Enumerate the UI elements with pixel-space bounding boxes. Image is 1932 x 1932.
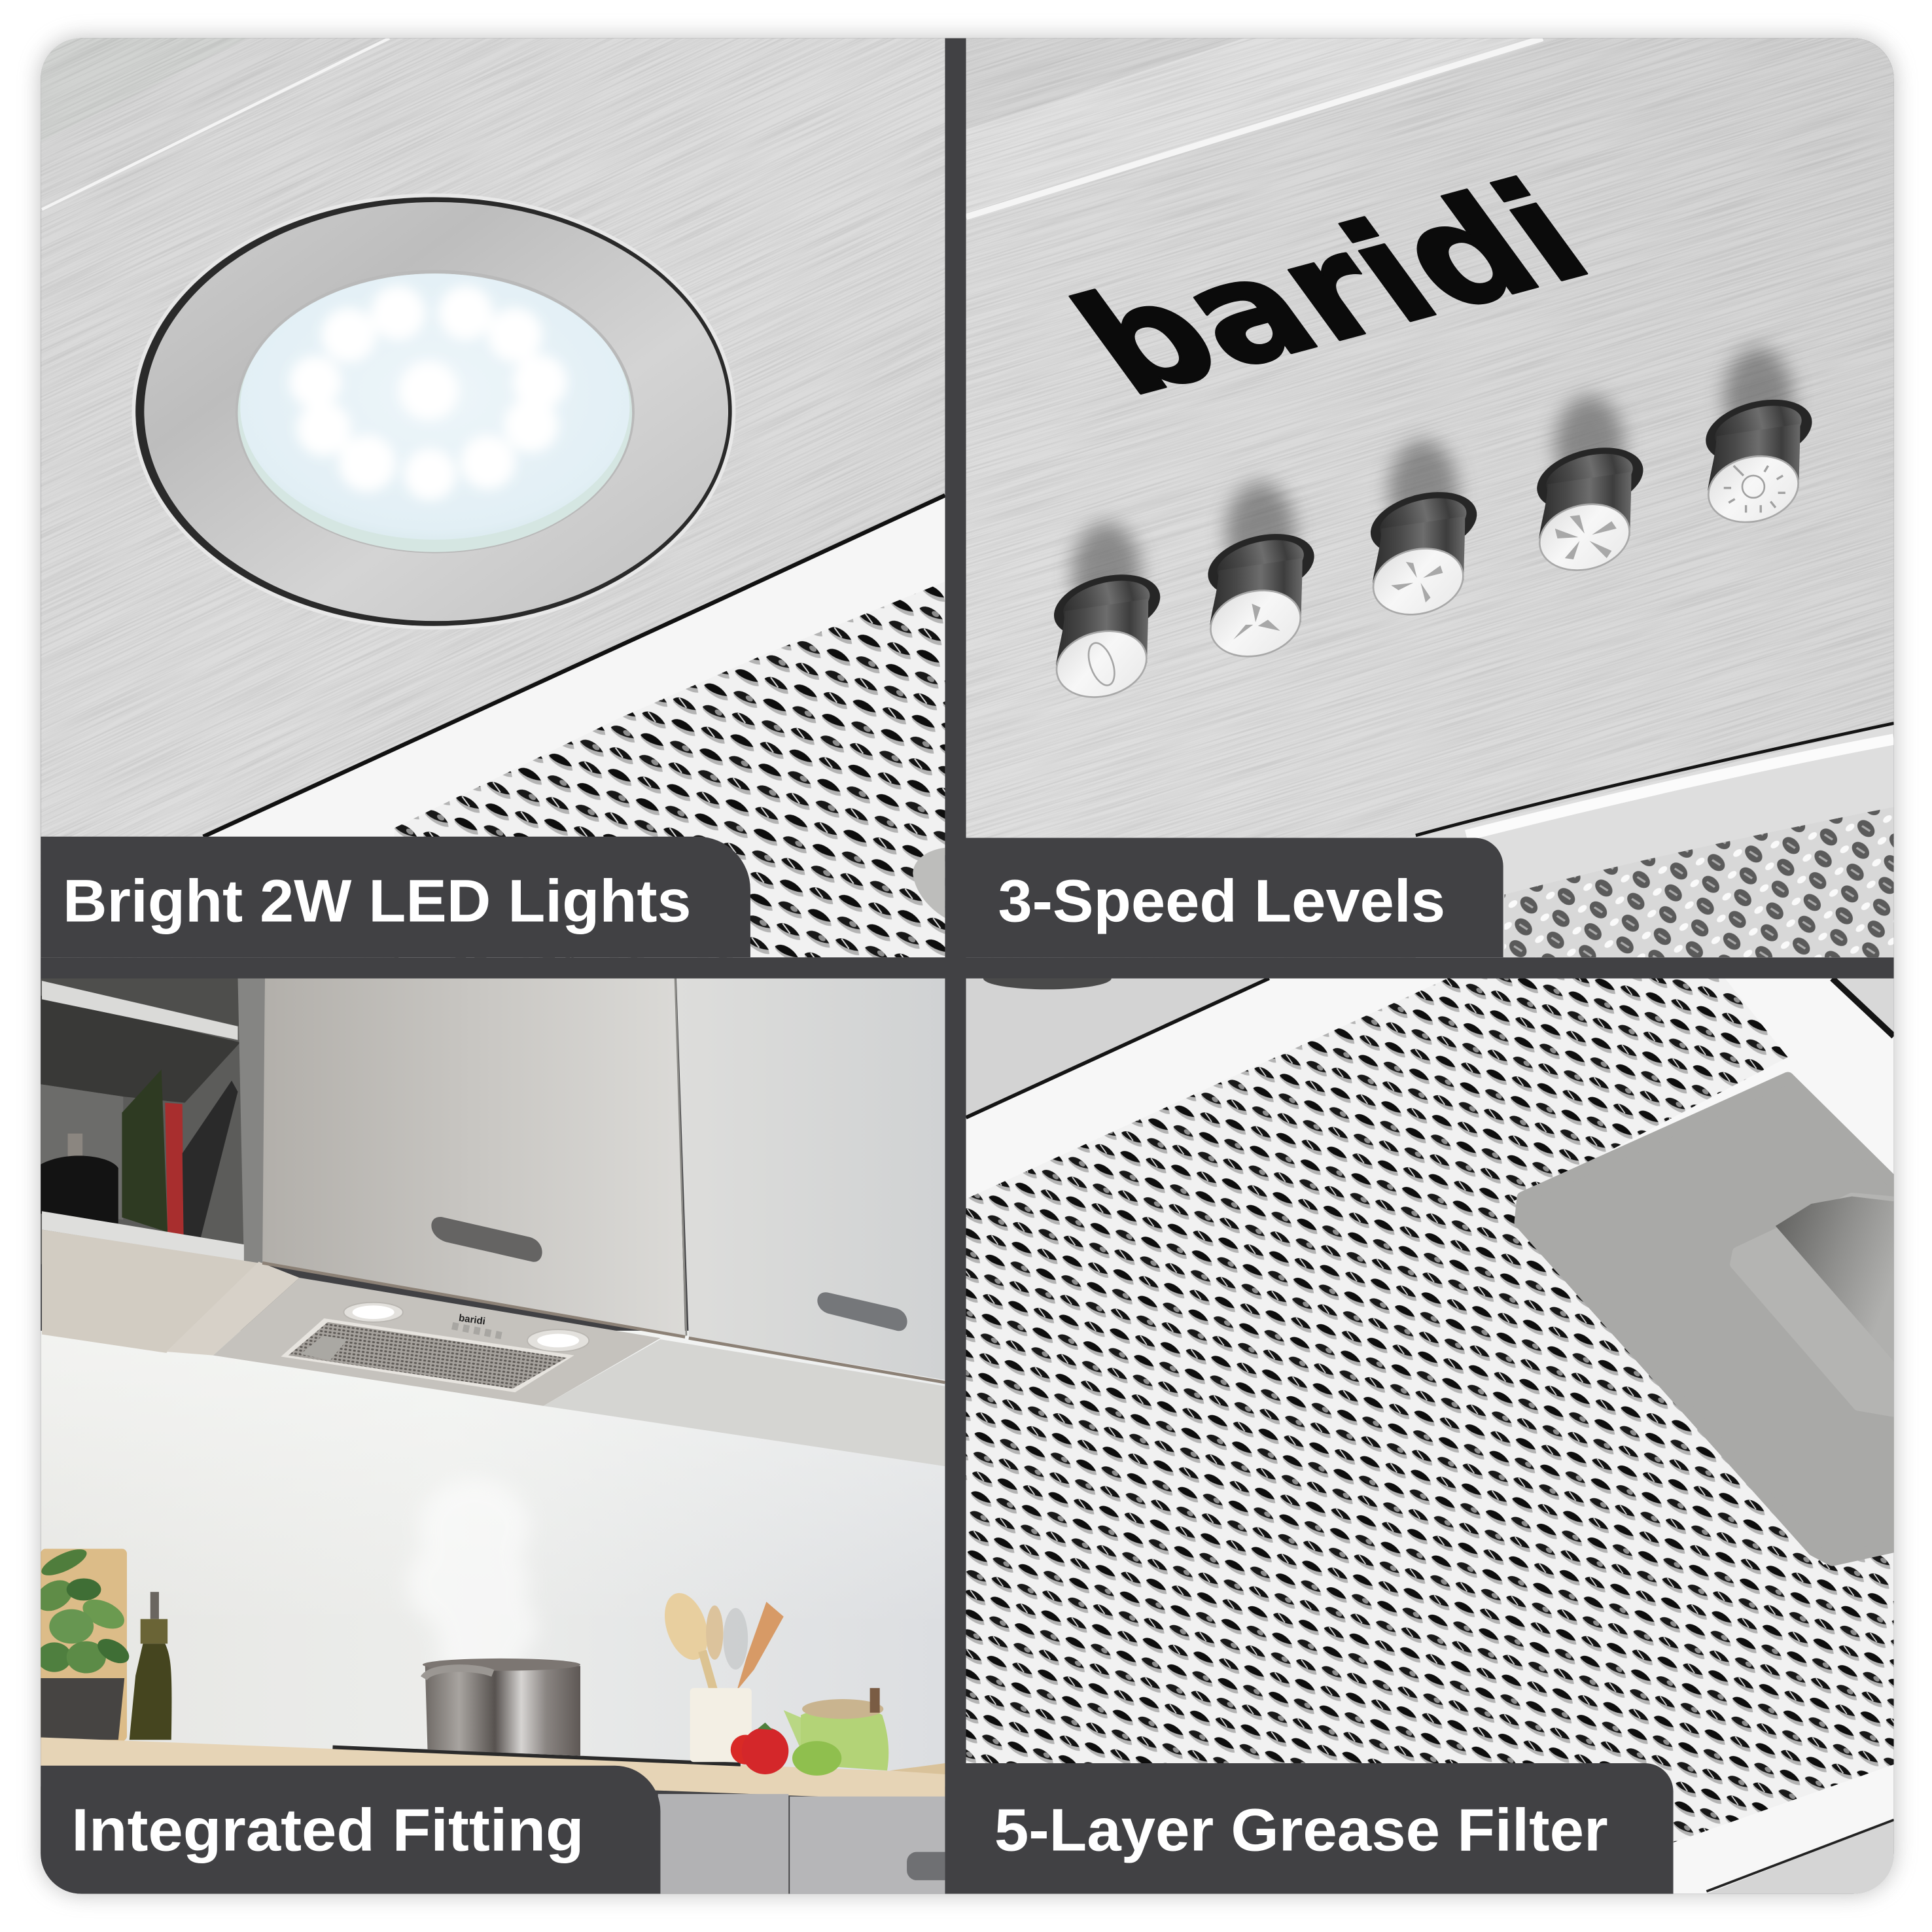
green pepper [792, 1741, 841, 1776]
second spoon [706, 1606, 723, 1660]
door right [676, 978, 945, 1380]
red book [165, 1103, 184, 1235]
top right steel [1832, 978, 1894, 1036]
brushed steel surface [966, 38, 1894, 957]
label: 5-Layer Grease Filter [966, 1763, 1674, 1894]
white frame band [1416, 724, 1894, 961]
filter mesh [1504, 807, 1894, 957]
knob: light [1699, 347, 1819, 531]
soffit right [544, 1339, 945, 1466]
whisk [723, 1608, 748, 1670]
lower cabinet handle [907, 1852, 956, 1880]
tab recess [1735, 1198, 1894, 1412]
tomatoes [731, 1723, 788, 1774]
lamp ring and lens [132, 194, 735, 629]
soffit left [42, 1230, 258, 1353]
knob: speed 2 [1364, 440, 1483, 624]
white frame band [203, 497, 945, 838]
panel: grease filter [966, 967, 1894, 1894]
top right shadow edge [1832, 978, 1894, 1036]
hood panel [213, 1278, 660, 1406]
label: Integrated Fitting [41, 1766, 660, 1894]
label: 3-Speed Levels [966, 838, 1503, 957]
shelf top board [42, 981, 237, 1040]
frame shadow edge [966, 978, 1269, 1117]
label: Bright 2W LED Lights: Bright 2W LED Lights [63, 867, 692, 935]
green kettle [784, 1688, 888, 1770]
upper fold band [966, 38, 1543, 217]
grey tab [1520, 1078, 1894, 1560]
shelf side panel [237, 978, 265, 1264]
label: 5-Layer Grease Filter: 5-Layer Grease Filter [994, 1796, 1608, 1864]
steel corner [966, 978, 1264, 1116]
handle right [817, 1292, 907, 1331]
frame shadow edge [203, 495, 945, 837]
tab grip [1776, 1197, 1894, 1361]
hood filter [281, 1318, 574, 1392]
lower cabinet right [790, 1797, 946, 1895]
cooktop [332, 1748, 741, 1765]
wooden spoon [657, 1587, 716, 1665]
frame highlight [1466, 739, 1894, 835]
cutting board [41, 1549, 127, 1741]
door trim [262, 1263, 945, 1382]
filter tab [913, 848, 945, 918]
upper shelf box interior [41, 978, 265, 1264]
shelf back shade [41, 1084, 123, 1220]
brushed steel surface [41, 38, 945, 957]
green book [122, 1070, 167, 1232]
lower shelf board [42, 1211, 244, 1261]
label: 3-Speed Levels: 3-Speed Levels [998, 867, 1445, 935]
hood lamps and controls [343, 1303, 589, 1352]
wall [41, 1331, 945, 1787]
grease filter mesh [395, 582, 945, 957]
brushed texture [436, 0, 1932, 1674]
label: Bright 2W LED Lights [41, 837, 750, 957]
mottled corner [966, 38, 1244, 130]
knob: speed 3 [1530, 396, 1650, 579]
fold line [42, 38, 389, 209]
door left [262, 978, 685, 1335]
panel: speed controls [436, 0, 1932, 1674]
lower cabinet left [658, 1794, 788, 1895]
upper shelf underside [41, 996, 240, 1103]
black pot on shelf [41, 1134, 118, 1223]
hood lamps and controls: baridi [458, 1312, 486, 1327]
panel: integrated fitting kitchen scene [30, 978, 956, 1895]
fold highlight [966, 38, 1543, 217]
steam [406, 1479, 538, 1679]
counter top [41, 1737, 945, 1801]
frame shadow edge [1416, 723, 1894, 835]
knob: speed 1 [1201, 482, 1321, 665]
lower shadow edge [1706, 1820, 1894, 1891]
cooking pot [423, 1659, 580, 1756]
cutting board on counter [890, 1763, 945, 1774]
spatula [737, 1602, 784, 1691]
brushed texture [41, 38, 945, 836]
label: Integrated Fitting: Integrated Fitting [71, 1796, 584, 1864]
wall glow [41, 1331, 945, 1626]
logo: baridi [1042, 152, 1621, 427]
panel: bright LED lights [41, 38, 945, 958]
black book [183, 1081, 237, 1237]
filter mesh [966, 978, 1894, 1894]
plant pot [41, 1678, 124, 1740]
oil bottle [130, 1592, 171, 1740]
utensil crock [690, 1688, 752, 1762]
lamp ring edge [983, 967, 1112, 989]
plant leaves [30, 1544, 133, 1674]
lower steel corner [1706, 1820, 1894, 1894]
door seam [675, 978, 686, 1335]
knob: off [1047, 523, 1167, 706]
shelf top band [41, 978, 240, 1027]
white frame base [966, 978, 1894, 1894]
soffit strip [166, 1261, 300, 1356]
handle left [431, 1217, 542, 1262]
LED points [290, 286, 567, 501]
